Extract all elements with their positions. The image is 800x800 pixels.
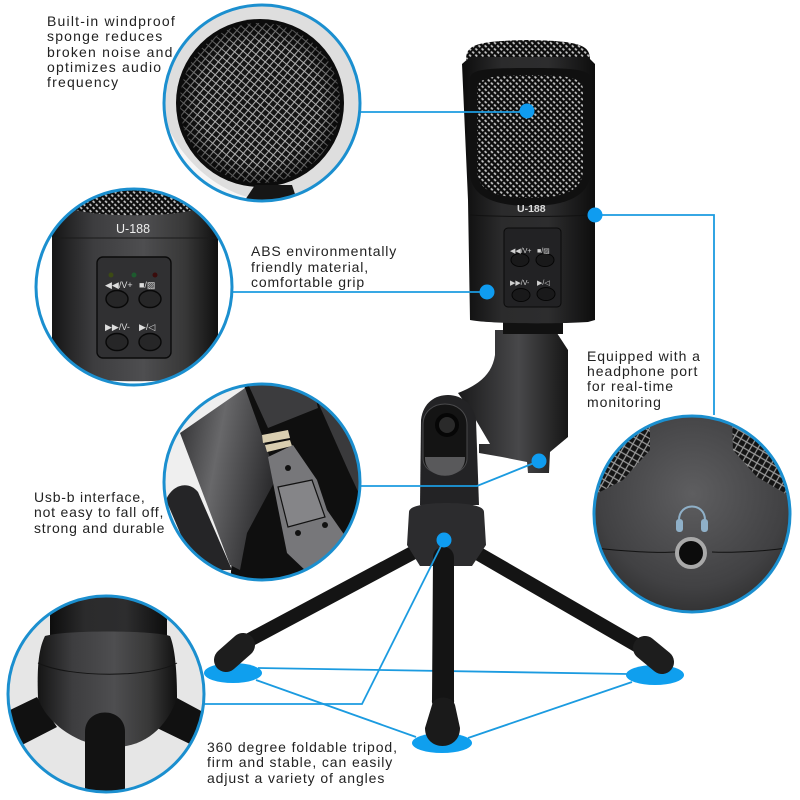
close-up panel: ■/▨	[139, 280, 155, 290]
text: ABS material	[251, 243, 397, 290]
foot highlight front	[412, 733, 472, 753]
tripod rear legs	[226, 550, 662, 662]
text: USB interface: Usb-b interface,	[34, 489, 146, 505]
model label: U-188	[517, 203, 546, 215]
foot highlight right	[626, 665, 684, 685]
front grille	[477, 75, 583, 198]
mesh frame	[176, 19, 344, 187]
front foot	[425, 698, 460, 746]
text: tripod: firm and stable, can easily	[207, 754, 393, 770]
text: USB interface: not easy to fall off,	[34, 504, 164, 520]
text: tripod: adjust a variety of angles	[207, 770, 385, 786]
sponge rim	[166, 6, 358, 197]
text: ABS material: comfortable grip	[251, 274, 365, 290]
close-up panel: ◀◀/V+	[105, 280, 133, 290]
control panel: ▶▶/V-	[510, 280, 530, 287]
text: windproof sponge: frequency	[47, 74, 119, 90]
close-up panel	[97, 257, 171, 358]
headphone icon	[677, 506, 707, 531]
pivot screw	[423, 404, 467, 476]
text: headphone port: monitoring	[587, 394, 662, 410]
panel: USB-B close-up	[166, 386, 358, 578]
close-up panel: ▶▶/V-	[105, 322, 130, 332]
text: headphone port: for real-time	[587, 378, 674, 394]
stand stub	[246, 185, 295, 200]
control panel: ■/▨	[537, 248, 550, 255]
left mesh	[598, 427, 650, 493]
control panel: ▶/◁	[537, 280, 550, 287]
mic neck	[503, 316, 563, 334]
foot highlight left	[204, 663, 262, 683]
text: USB interface	[34, 489, 165, 536]
callout dots	[436, 104, 602, 548]
stand clip	[458, 330, 568, 473]
pivot arm	[420, 395, 479, 505]
panel: windproof sponge close-up	[166, 6, 358, 200]
panel: control close-up	[52, 190, 218, 382]
microphone top grille	[466, 40, 590, 60]
close-up panel: ▶/◁	[139, 322, 155, 332]
body seam	[470, 215, 590, 216]
grip body	[52, 210, 218, 382]
text: windproof sponge: sponge reduces	[47, 28, 163, 44]
text: tripod	[207, 739, 398, 786]
hub column	[50, 598, 167, 636]
panel: headphone port close-up	[596, 418, 788, 610]
tripod front leg	[432, 547, 454, 709]
USB gold contacts	[262, 430, 292, 452]
hub	[38, 632, 177, 747]
text: windproof sponge: optimizes audio	[47, 59, 162, 75]
jack	[677, 539, 705, 567]
microphone body	[462, 57, 595, 323]
hub seam	[38, 663, 177, 674]
tripod collar	[407, 503, 486, 566]
front leg	[85, 712, 125, 790]
mesh disc	[180, 23, 340, 183]
text: headphone port	[587, 348, 701, 410]
clip wall	[180, 388, 277, 570]
connector lines	[204, 112, 714, 704]
control panel: ◀◀/V+	[510, 248, 531, 255]
dark back	[230, 384, 362, 585]
text: windproof sponge: broken noise and	[47, 44, 174, 60]
text: USB interface: strong and durable	[34, 520, 165, 536]
bright lower crescent	[170, 131, 247, 198]
text: windproof sponge: Built-in windproof	[47, 13, 176, 29]
top grey band	[248, 384, 318, 428]
text: tripod: 360 degree foldable tripod,	[207, 739, 398, 755]
grille recess	[470, 68, 590, 206]
panel: tripod hub close-up	[10, 598, 202, 790]
rear legs	[8, 697, 205, 745]
text: ABS material: ABS environmentally	[251, 243, 397, 259]
USB plug	[268, 445, 344, 569]
pivot knob	[166, 485, 232, 570]
text: windproof sponge	[47, 13, 176, 90]
close-up grille	[76, 190, 192, 216]
close-up model label: U-188	[116, 222, 150, 236]
text: headphone port: Equipped with a	[587, 348, 701, 364]
foot triangle lines	[256, 668, 632, 738]
seam	[602, 548, 782, 553]
microphone product	[226, 40, 662, 746]
text: headphone port: headphone port	[587, 363, 698, 379]
text: ABS material: friendly material,	[251, 259, 369, 275]
close-up seam	[65, 238, 217, 239]
right grey band	[318, 404, 358, 491]
control panel	[504, 228, 561, 307]
